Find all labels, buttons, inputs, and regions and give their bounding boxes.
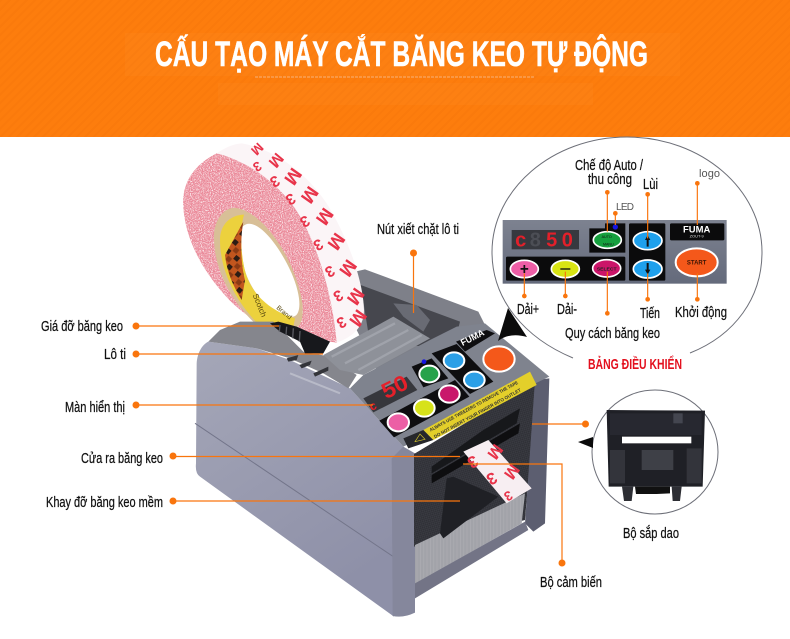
plus button bbox=[510, 260, 538, 278]
roller assembly bbox=[323, 303, 430, 375]
machine with tape roll bbox=[183, 140, 549, 617]
label: Nút xiết chặt lô ti: Nút xiết chặt lô ti bbox=[377, 221, 459, 238]
tape logos: 3 bbox=[297, 211, 313, 230]
tape logos: 3 bbox=[322, 261, 338, 280]
callout outline bbox=[492, 137, 762, 358]
panel labels: Quy cách băng keo bbox=[565, 325, 660, 342]
auto button bbox=[593, 232, 621, 248]
display block: 5 bbox=[546, 230, 557, 252]
tape logos: M bbox=[280, 164, 306, 189]
label: Màn hiển thị bbox=[65, 399, 373, 416]
start button bbox=[676, 248, 718, 276]
label: Khay đỡ băng keo mềm bbox=[46, 494, 460, 511]
LED display bbox=[363, 370, 417, 414]
display block bbox=[512, 230, 579, 252]
tape logos: 3 bbox=[250, 158, 264, 175]
label: Khay đỡ băng keo mềm: Khay đỡ băng keo mềm bbox=[46, 494, 163, 511]
tape scotch text bbox=[251, 292, 293, 321]
label: Bộ cảm biến: Bộ cảm biến bbox=[540, 574, 602, 591]
tape logos: 3 bbox=[310, 235, 326, 254]
FUMA logo: ZOUT-9 bbox=[690, 234, 705, 239]
machine corner column bbox=[392, 447, 415, 617]
tape pink face bbox=[183, 153, 337, 343]
exit tape strip bbox=[463, 440, 532, 504]
machine side bbox=[196, 342, 403, 617]
tape hole bbox=[241, 224, 299, 317]
right column bbox=[525, 378, 549, 532]
leader lines bbox=[524, 183, 697, 313]
label: Lô ti: Lô ti bbox=[104, 346, 126, 363]
select button bbox=[593, 260, 621, 277]
plus button: + bbox=[520, 261, 529, 278]
exit tape strip: 3 bbox=[501, 488, 515, 504]
tape logos bbox=[248, 140, 371, 331]
tape logos: M bbox=[335, 256, 361, 281]
tape scotch text: Scotch bbox=[251, 292, 268, 318]
display block: c bbox=[515, 230, 526, 252]
tape core bbox=[214, 208, 303, 327]
select button: SELECT bbox=[597, 266, 617, 272]
front warning label: ALWAYS USE TWEEZERS TO REMOVE THE TAPE bbox=[429, 380, 519, 433]
panel caption: BẢNG ĐIỀU KHIỂN bbox=[588, 355, 682, 373]
bottom ledge bbox=[415, 522, 528, 598]
FUMA logo: FUMA bbox=[683, 225, 711, 235]
exit tape strip: M bbox=[500, 461, 524, 483]
enlarged panel bbox=[503, 181, 727, 316]
LED display: c bbox=[367, 398, 379, 414]
front warning label: DO NOT INSERT YOUR FINGER INTO OUTLET bbox=[433, 388, 522, 439]
circle outline bbox=[592, 390, 718, 514]
tape plaid core label bbox=[225, 222, 245, 300]
auto button: MANU bbox=[603, 242, 614, 246]
display block: 8 bbox=[530, 230, 541, 252]
tape logos: M bbox=[345, 306, 371, 331]
machine front dark face bbox=[414, 380, 537, 547]
tape yellow liner bbox=[220, 215, 295, 327]
panel buttons bbox=[388, 346, 515, 431]
tape logos: M bbox=[323, 229, 350, 254]
start button: START bbox=[687, 260, 707, 266]
exit tape strip: 3 bbox=[464, 451, 482, 472]
soft tape tray bbox=[440, 477, 498, 538]
LED display: 50 bbox=[377, 370, 412, 404]
FUMA logo: FUMA bbox=[459, 327, 486, 348]
display block: 0 bbox=[562, 230, 573, 252]
front warning label bbox=[403, 372, 537, 448]
panel labels: LED bbox=[616, 202, 634, 213]
exit tape strip: 3 bbox=[483, 468, 501, 489]
cutter unit bbox=[607, 410, 705, 501]
tape logos: 3 bbox=[330, 286, 346, 305]
minus button bbox=[551, 260, 579, 278]
label: Nút xiết chặt lô ti bbox=[377, 221, 459, 313]
FUMA logo bbox=[683, 225, 711, 239]
tape logos: 3 bbox=[282, 189, 298, 208]
tape holder top surface bbox=[208, 322, 357, 388]
panel labels: Dải+ bbox=[517, 301, 539, 318]
panel labels: logo bbox=[699, 168, 720, 180]
tape logos: M bbox=[312, 204, 338, 229]
exit tape strip: M bbox=[483, 441, 507, 463]
label: Bộ cảm biến bbox=[463, 464, 602, 591]
black blocks bbox=[506, 223, 724, 281]
tape logos: 3 bbox=[267, 171, 283, 190]
lower clear panel bbox=[415, 493, 525, 584]
callout pointer bbox=[498, 308, 527, 341]
tape logos: M bbox=[343, 284, 369, 309]
leader dots bbox=[522, 181, 700, 316]
down button bbox=[633, 260, 662, 278]
auto button: AUTO bbox=[602, 235, 612, 239]
control top panel bbox=[350, 323, 549, 447]
tape logos: M bbox=[297, 183, 323, 207]
leader to cutter bbox=[532, 420, 589, 428]
panel labels: thu công bbox=[588, 171, 632, 188]
panel labels: Tiến bbox=[640, 305, 660, 322]
panel labels: Dải- bbox=[557, 301, 577, 318]
circle pointer bbox=[578, 437, 593, 448]
tape logos: M bbox=[265, 149, 286, 170]
label: Giá đỡ băng keo: Giá đỡ băng keo bbox=[41, 318, 123, 335]
blue LED bbox=[613, 224, 618, 230]
panel labels: Chế độ Auto / bbox=[575, 157, 644, 174]
panel labels: Khởi động bbox=[675, 304, 727, 321]
slots bbox=[287, 355, 328, 377]
tape scotch text: Brand bbox=[275, 305, 293, 321]
label: Giá đỡ băng keo bbox=[41, 318, 279, 335]
control panel callout bbox=[492, 137, 762, 373]
label: Cửa ra băng keo bbox=[81, 450, 460, 467]
panel black blocks bbox=[379, 330, 495, 437]
rear housing bbox=[355, 269, 485, 370]
black comb bbox=[270, 322, 330, 353]
blue LED bbox=[422, 359, 426, 364]
tape outer band bbox=[217, 143, 364, 343]
label: Cửa ra băng keo: Cửa ra băng keo bbox=[81, 450, 163, 467]
tape roll bbox=[183, 140, 371, 343]
header band bbox=[0, 0, 790, 137]
tape exit slot bbox=[432, 408, 520, 473]
panel labels: Lùi bbox=[643, 176, 658, 193]
tape logos: 3 bbox=[333, 312, 349, 331]
cutter caption: Bộ sắp dao bbox=[623, 525, 679, 542]
up button bbox=[633, 232, 662, 250]
label: Màn hiển thị: Màn hiển thị bbox=[65, 399, 125, 416]
cutter detail callout bbox=[532, 390, 718, 542]
tape logos: M bbox=[248, 140, 267, 158]
label: Lô ti bbox=[104, 346, 323, 363]
panel labels bbox=[517, 157, 727, 342]
